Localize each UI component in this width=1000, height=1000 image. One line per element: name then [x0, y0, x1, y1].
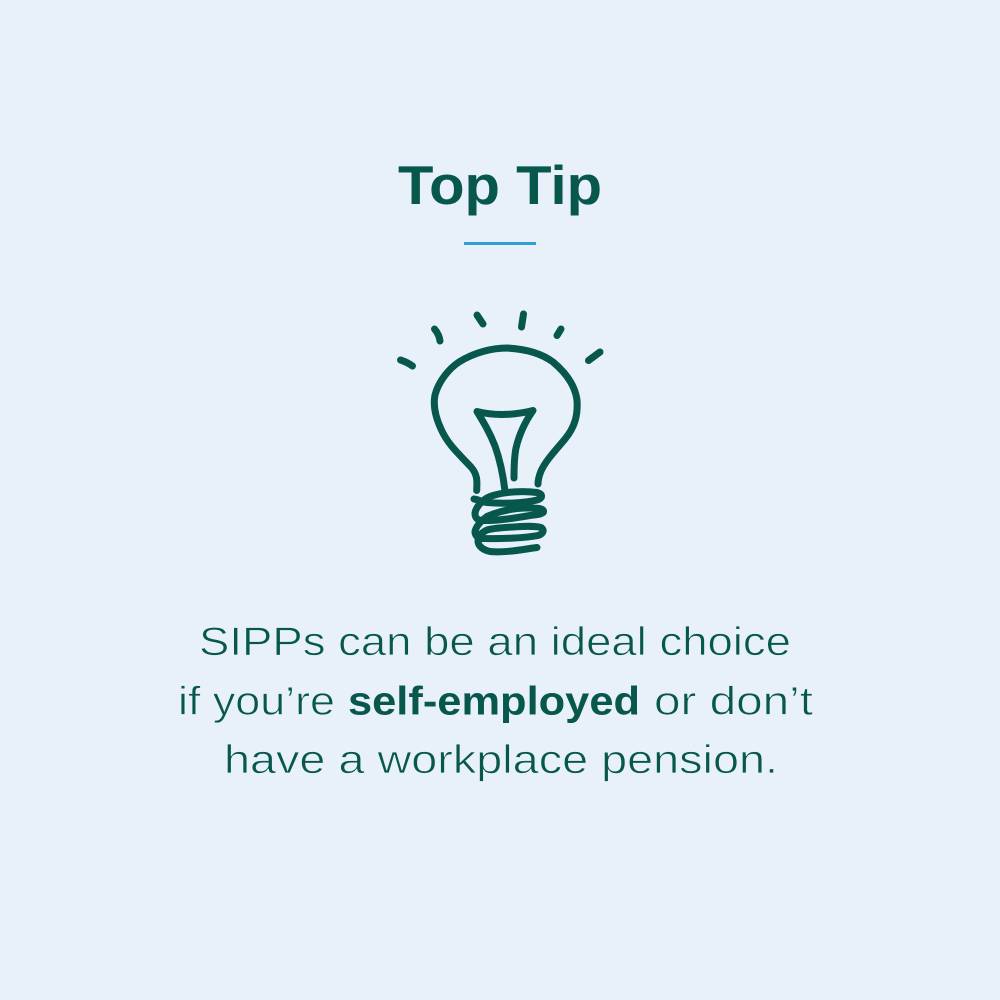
text line 2: self-employed: [348, 680, 640, 724]
title: Top Tip: [398, 154, 602, 216]
icon: rays: [400, 314, 600, 366]
icon: light bulb: [400, 314, 600, 552]
icon: filament: [477, 410, 533, 491]
text line 1: SIPPs can be an ideal choice: [199, 620, 791, 664]
text line 2: or don’t: [654, 680, 813, 724]
icon: bulb glass: [434, 348, 577, 490]
text line 2: [178, 680, 813, 724]
text line 3: have a workplace pension.: [224, 738, 778, 782]
body text: [178, 620, 813, 782]
accent underline: [464, 242, 536, 245]
text line 2: if you’re: [178, 680, 335, 724]
icon: screw base coil: [474, 492, 544, 552]
